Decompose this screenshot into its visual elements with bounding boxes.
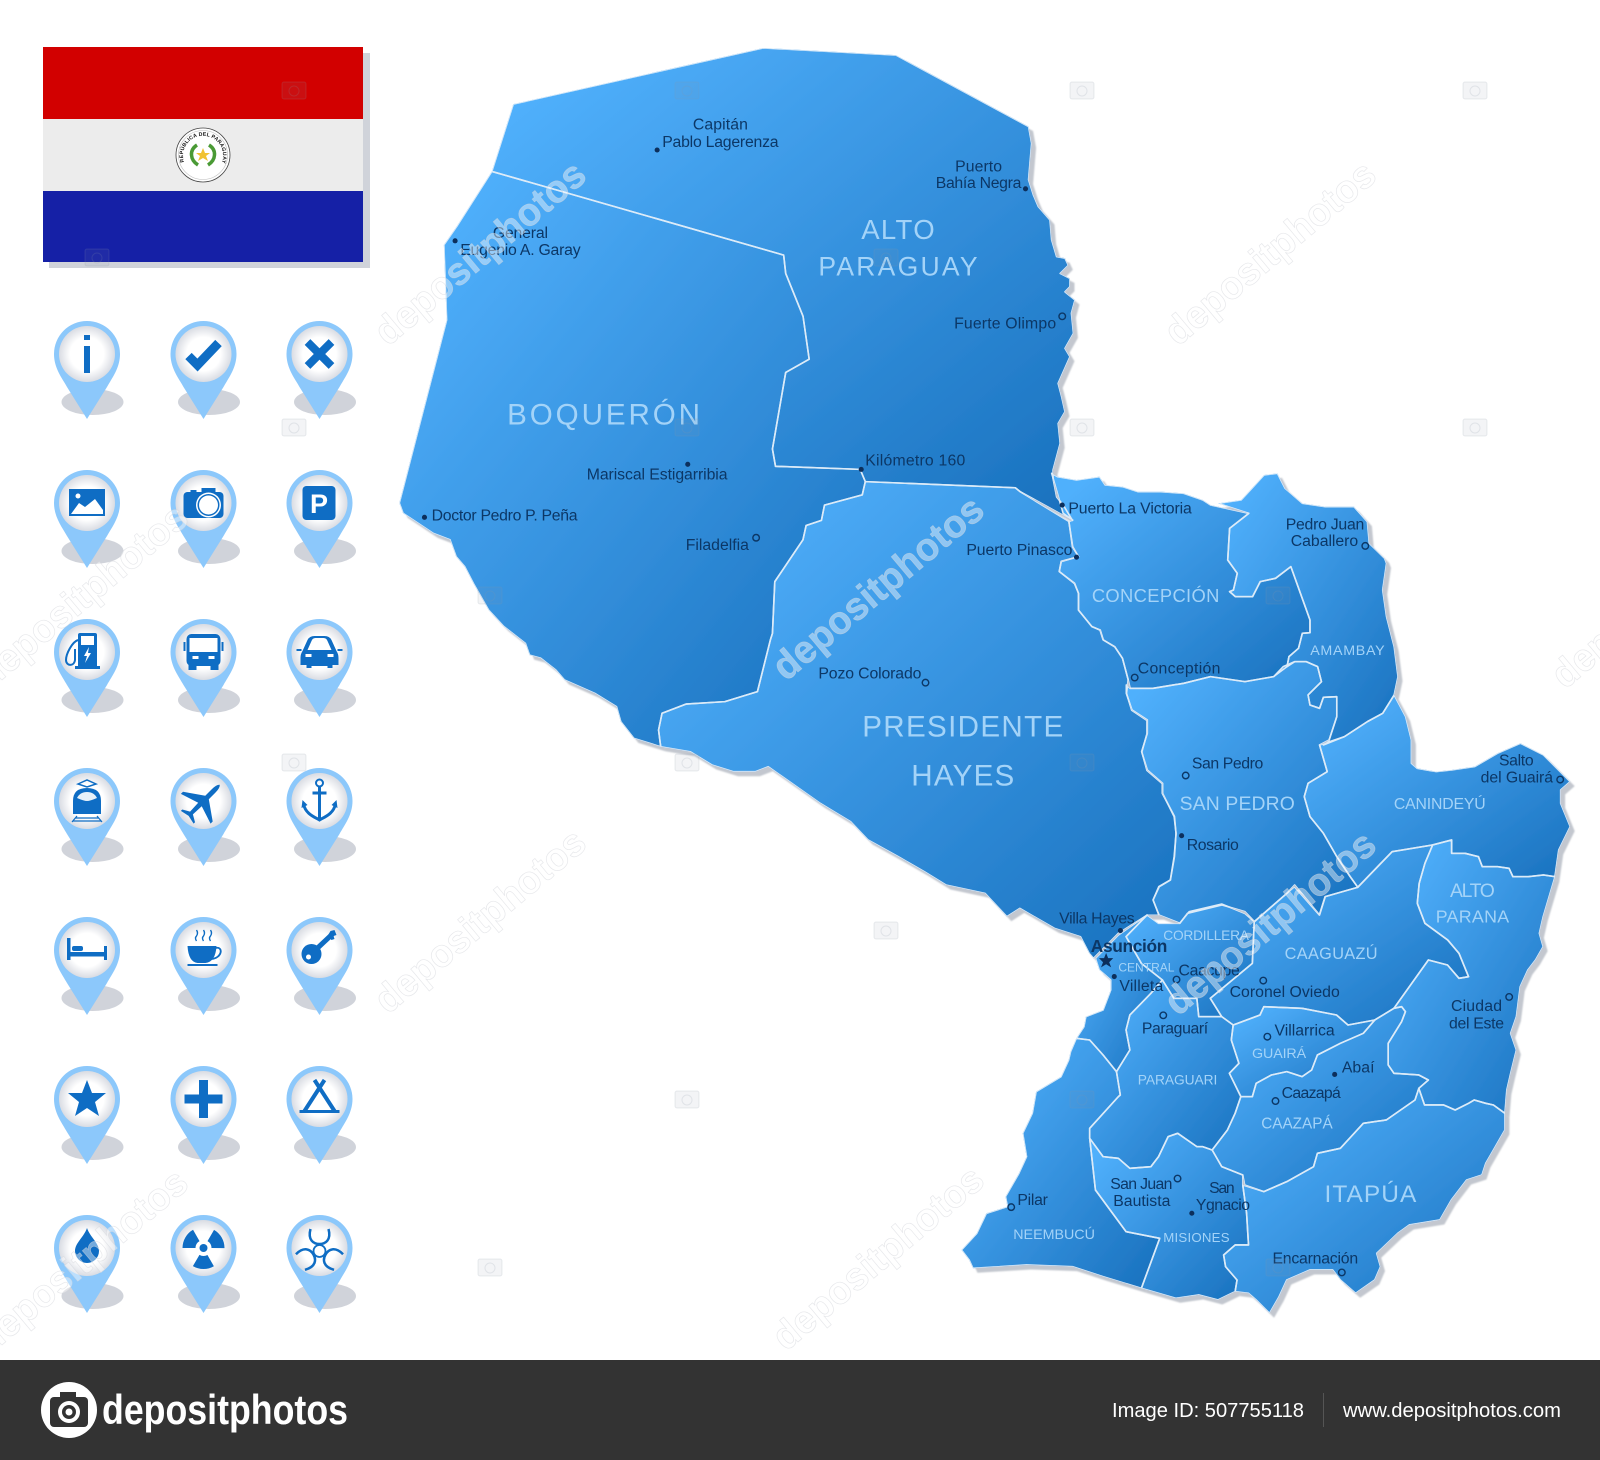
city names: Paraguarí: [1142, 1021, 1209, 1038]
department names: ALTO: [1450, 880, 1495, 902]
city markers: [422, 147, 1563, 1276]
watermark text: depositphotos: [366, 821, 594, 1022]
department names: NEEMBUCÚ: [1013, 1226, 1095, 1243]
city names: Fuerte Olimpo: [954, 316, 1056, 333]
region: Canindeyú: [1304, 695, 1570, 887]
city names: Ciudad: [1451, 998, 1502, 1015]
department borders: [399, 48, 1570, 1313]
region: Concepción: [1052, 473, 1310, 688]
city names: Pablo Lagerenza: [662, 134, 779, 151]
pin: anchor: [286, 768, 356, 866]
logo: depositphotos camera: [41, 1382, 97, 1438]
department names: CORDILLERA: [1163, 928, 1250, 943]
department names: PARAGUARI: [1138, 1073, 1217, 1088]
department names: MISIONES: [1163, 1230, 1230, 1245]
city names: Pilar: [1017, 1192, 1048, 1209]
city names: Villa Hayes: [1059, 910, 1135, 927]
city names: Puerto: [955, 158, 1002, 175]
city names: Coronel Oviedo: [1230, 984, 1340, 1001]
map labels: [422, 117, 1563, 1276]
city names: Asunción: [1091, 936, 1167, 956]
pin: biohazard: [286, 1215, 356, 1313]
city names: Doctor Pedro P. Peña: [432, 507, 578, 524]
pin: key: [286, 917, 356, 1015]
city names: Caazapá: [1282, 1085, 1341, 1102]
footer bar: [0, 1360, 1600, 1460]
city names: [432, 117, 1553, 1267]
department names: CAAGUAZÚ: [1285, 944, 1378, 963]
department names: PRESIDENTE: [862, 711, 1063, 744]
city names: San Pedro: [1192, 755, 1263, 772]
city names: Filadelfia: [686, 537, 749, 554]
watermark text: depositphotos: [1156, 823, 1384, 1024]
department names: PARAGUAY: [818, 252, 978, 282]
image id: Image ID: 507755118: [1112, 1400, 1304, 1422]
department names: ITAPÚA: [1324, 1181, 1417, 1208]
pin: parking: [286, 470, 356, 568]
department names: SAN PEDRO: [1180, 793, 1295, 815]
city names: General: [493, 225, 548, 242]
watermark text: depositphotos: [1156, 153, 1384, 354]
department names: CENTRAL: [1118, 960, 1175, 974]
watermark text: depositphotos: [764, 1158, 992, 1359]
city names: Villeta: [1119, 978, 1163, 995]
city names: Abaí: [1342, 1059, 1375, 1076]
city names: Bautista: [1113, 1193, 1171, 1210]
department names: AMAMBAY: [1310, 643, 1385, 659]
region: Amambay: [1218, 473, 1398, 745]
pin: check: [170, 321, 240, 419]
city names: Pozo Colorado: [818, 666, 922, 683]
city names: Puerto Pinasco: [966, 542, 1073, 559]
department names: ALTO: [861, 214, 935, 245]
city names: Villarrica: [1274, 1023, 1335, 1040]
logo wordmark: depositphotos: [102, 1386, 348, 1433]
city names: Caacupe: [1179, 963, 1240, 980]
pin: fuel: [54, 619, 124, 717]
region: Presidente Hayes: [659, 482, 1176, 958]
region: Cordillera: [1126, 904, 1254, 1017]
region: Central: [1076, 915, 1162, 1072]
pin: camera: [170, 470, 240, 568]
pin: picture: [54, 470, 124, 568]
region: Paraguarí: [1090, 980, 1241, 1168]
region: Misiones: [1090, 1133, 1249, 1300]
city names: Pedro Juan: [1286, 517, 1364, 534]
department names: CANINDEYÚ: [1394, 794, 1486, 813]
pin: bus: [170, 619, 240, 717]
department names: [507, 214, 1509, 1245]
pin: star: [54, 1066, 124, 1164]
department names: HAYES: [911, 760, 1014, 793]
pin: car: [286, 619, 356, 717]
pin: radiation: [170, 1215, 240, 1313]
region: Alto Paraguay: [492, 48, 1075, 520]
pin: train: [54, 768, 124, 866]
pin: plus: [170, 1066, 240, 1164]
city names: Capitán: [693, 117, 748, 134]
pin: coffee cup: [170, 917, 240, 1015]
city names: Ygnacio: [1196, 1197, 1250, 1214]
flag seal: REPÚBLICA DEL PARAGUAY: [179, 132, 227, 164]
region: Alto Paraná: [1388, 840, 1555, 1113]
department names: GUAIRÁ: [1252, 1045, 1307, 1062]
department names: BOQUERÓN: [507, 398, 700, 431]
map of Paraguay departments: [399, 48, 1570, 1313]
city names: Encarnación: [1272, 1250, 1358, 1267]
region: Caaguazú: [1210, 845, 1469, 1025]
pin: tent: [286, 1066, 356, 1164]
department names: PARANA: [1436, 906, 1509, 926]
pin: water drop: [54, 1215, 124, 1313]
region: Caazapá: [1212, 1007, 1428, 1192]
city names: Rosario: [1187, 837, 1239, 854]
city names: del Guairá: [1481, 770, 1553, 787]
pin: cross: [286, 321, 356, 419]
pin: info: [54, 321, 124, 419]
panel: map pin icons: [54, 321, 356, 1313]
flag of Paraguay: [43, 47, 370, 268]
city names: San Juan: [1110, 1176, 1172, 1193]
city names: Mariscal Estigarribia: [587, 467, 728, 484]
pin: parking: P: [310, 489, 328, 519]
watermark: faint camera marks: [85, 82, 1487, 1276]
department names: CONCEPCIÓN: [1092, 585, 1219, 606]
city names: Salto: [1499, 752, 1534, 769]
city names: Puerto La Victoria: [1068, 500, 1192, 517]
city names: del Este: [1449, 1016, 1504, 1033]
region: Guairá: [1229, 1007, 1375, 1097]
city names: San: [1209, 1180, 1235, 1197]
pin: bed: [54, 917, 124, 1015]
city names: Bahía Negra: [936, 175, 1022, 192]
city names: Conceptión: [1138, 660, 1220, 677]
website: www.depositphotos.com: [1342, 1400, 1561, 1422]
city names: Caballero: [1291, 533, 1358, 550]
region: Boquerón: [399, 171, 865, 747]
pin: airplane: [170, 768, 240, 866]
watermark text: depositphotos: [366, 153, 594, 354]
city names: Eugenio A. Garay: [460, 242, 581, 259]
region: Ñeembucú: [961, 1038, 1160, 1288]
department names: CAAZAPÁ: [1261, 1116, 1333, 1133]
city names: Kilómetro 160: [865, 452, 966, 469]
flag seal: [176, 128, 230, 182]
region: San Pedro: [1126, 662, 1358, 923]
region: Itapúa: [1224, 1088, 1505, 1313]
watermark text: depositphotos: [764, 488, 992, 689]
